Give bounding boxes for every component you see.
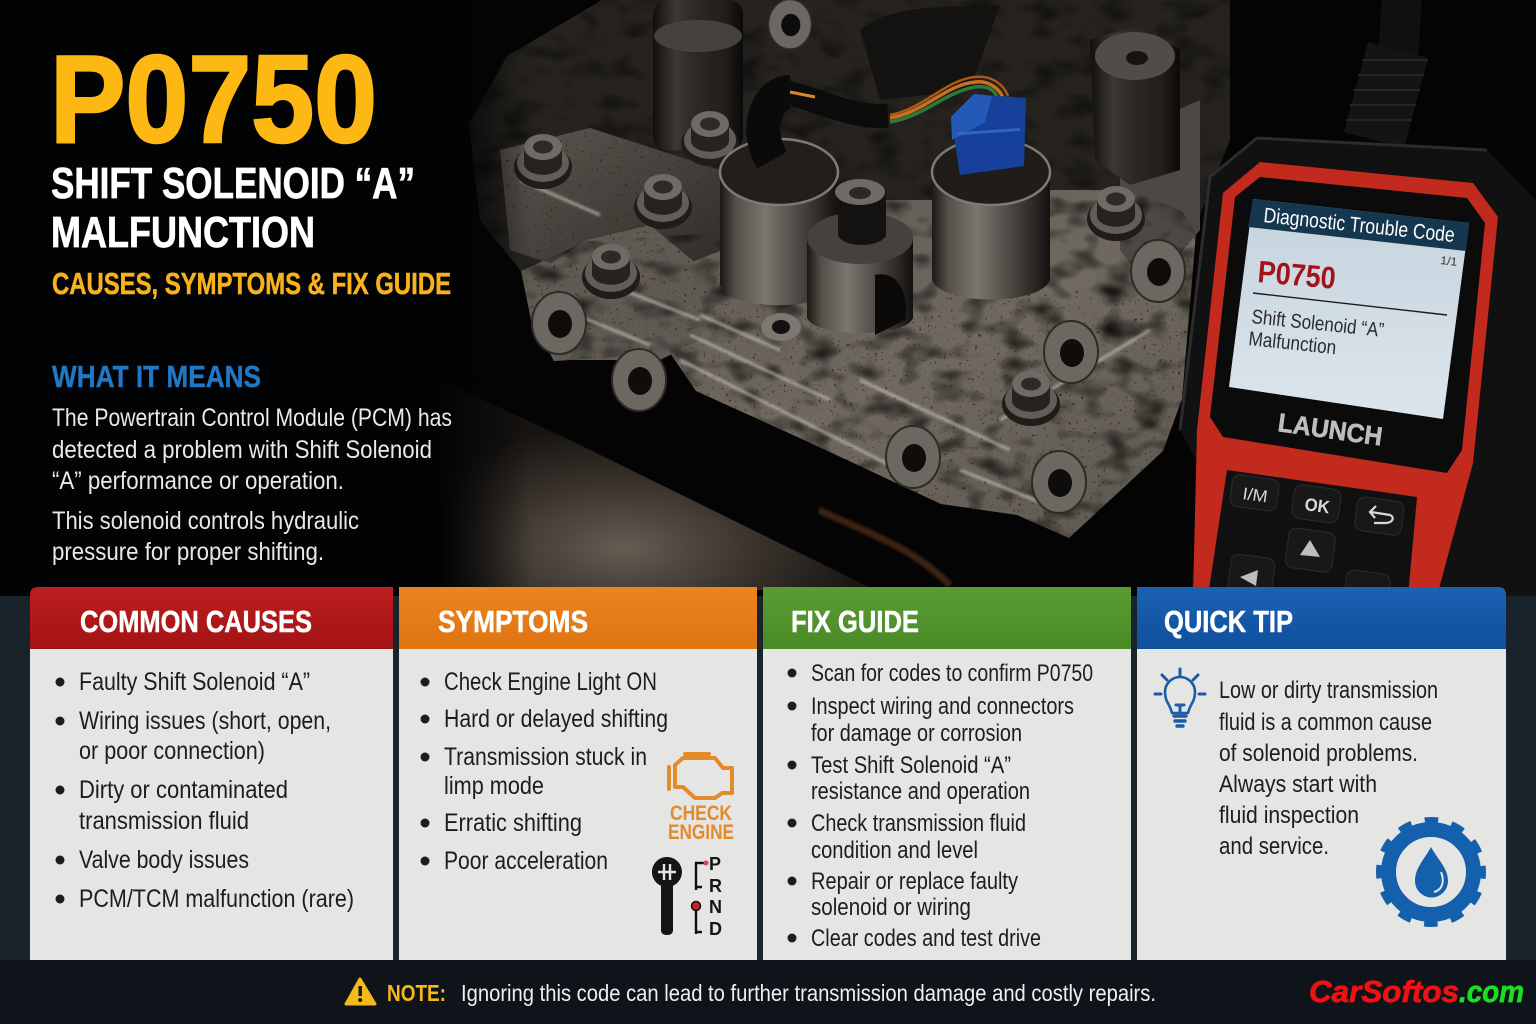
header: quick tip: QUICK TIP [1164,604,1293,639]
ground casting [440,380,875,590]
icon: check engine: ENGINE [668,821,734,844]
fade to black at left [440,0,530,596]
what it means text [52,404,452,566]
tip text: fluid is a common cause [1219,709,1432,736]
tip text: of solenoid problems. [1219,740,1418,767]
header: fix guide: FIX GUIDE [791,604,919,639]
subtitle [51,159,415,257]
what it means text: “A” performance or operation. [52,467,344,495]
panel: fix guide [763,587,1131,960]
header: symptoms: SYMPTOMS [438,604,588,639]
tip text [1219,677,1438,860]
icon: light bulb [1155,669,1205,726]
screen description: Shift Solenoid “A” [1250,306,1385,342]
scanner cable [1398,0,1402,60]
what it means text: This solenoid controls hydraulic [52,507,359,535]
title: P0750 [50,31,377,169]
icon: warning triangle [346,979,375,1004]
icon: gear with fluid drop [1382,823,1480,921]
fix guide list: Repair or replace faulty [811,868,1018,895]
what it means heading: WHAT IT MEANS [52,359,261,394]
causes list: Valve body issues [79,846,249,874]
panel: quick tip [1137,587,1506,960]
header: symptoms [399,587,757,649]
fix guide list: solenoid or wiring [811,894,971,921]
note bar [0,960,1536,1024]
fix guide list: Test Shift Solenoid “A” [811,752,1011,779]
OBD2 scanner [1180,0,1536,611]
icon: gear shifter: N [709,897,722,917]
bolts and fittings [514,134,572,189]
subtitle: MALFUNCTION [51,208,315,257]
symptoms list: Transmission stuck in [444,743,647,771]
middle solenoid [807,179,913,335]
causes list: Faulty Shift Solenoid “A” [79,668,310,696]
watermark: CarSoftos.com [1309,974,1524,1009]
wiring harness [763,77,1008,160]
keypad area [1208,470,1417,596]
fix guide list: Inspect wiring and connectors [811,693,1074,720]
screen: Malfunction [1247,328,1337,359]
header: common causes [30,587,393,649]
right solenoid [932,139,1050,300]
lower dark band [0,596,1536,1024]
fix guide list [788,660,1093,952]
oil streak [819,510,950,585]
scanner housing [1180,138,1536,596]
icon: gear shifter: R [709,876,722,896]
symptoms list: limp mode [444,772,544,800]
watermark: CarSoftos.com: CarSoftos [1309,974,1459,1009]
causes list [56,668,354,913]
causes list: Wiring issues (short, open, [79,707,331,735]
note text: Ignoring this code can lead to further transmission damage and costly repairs. [461,980,1156,1006]
panel: symptoms [399,587,757,960]
symptoms list: Poor acceleration [444,847,608,875]
left text background [0,0,440,596]
red frame [1193,162,1498,596]
screen code: P0750 [1256,254,1337,296]
panel: common causes [30,587,393,960]
keypad buttons: OK [1303,494,1331,517]
keypad buttons: I/M [1241,484,1269,506]
what it means text: The Powertrain Control Module (PCM) has [52,404,452,432]
blue connector [951,94,1026,175]
symptoms list: Erratic shifting [444,809,582,837]
header: fix guide [763,587,1131,649]
what it means text: detected a problem with Shift Solenoid [52,436,432,464]
tip text: fluid inspection [1219,802,1359,829]
causes list: Dirty or contaminated [79,776,288,804]
causes list: or poor connection) [79,737,265,765]
fix guide list: Check transmission fluid [811,810,1026,837]
header: common causes: COMMON CAUSES [80,604,312,639]
what it means text: pressure for proper shifting. [52,538,324,566]
icon: gear shifter [652,854,722,939]
fix guide list: Scan for codes to confirm P0750 [811,660,1093,687]
valve body casting [500,100,1200,538]
fix guide list: resistance and operation [811,778,1030,805]
screen header text: Diagnostic Trouble Code [1262,204,1456,247]
header: quick tip [1137,587,1506,649]
note label: NOTE: [387,980,446,1006]
tip text: Always start with [1219,771,1377,798]
keypad buttons [1226,474,1405,611]
fix guide list: condition and level [811,837,978,864]
tip text: Low or dirty transmission [1219,677,1438,704]
tagline: CAUSES, SYMPTOMS & FIX GUIDE [52,266,451,301]
symptoms list: Hard or delayed shifting [444,705,668,733]
causes list: PCM/TCM malfunction (rare) [79,885,354,913]
subtitle: SHIFT SOLENOID “A” [51,159,415,208]
LAUNCH brand: LAUNCH [1276,407,1384,452]
left solenoid [720,139,838,305]
tip text: and service. [1219,833,1329,860]
causes list: transmission fluid [79,807,249,835]
icon: gear shifter: P [709,854,721,874]
screen: 1/1 [1440,255,1458,269]
screen bezel [1210,177,1485,473]
icon: check engine: CHECK [670,802,732,825]
symptoms list [420,668,668,875]
icon: gear shifter: D [709,919,722,939]
screen [1229,199,1469,419]
fix guide list: for damage or corrosion [811,720,1022,747]
icon: check engine [668,754,734,844]
watermark: CarSoftos.com: .com [1459,974,1524,1009]
fix guide list: Clear codes and test drive [811,925,1041,952]
photo: transmission valve body [440,0,1536,596]
symptoms list: Check Engine Light ON [444,668,657,696]
top components [653,0,743,150]
